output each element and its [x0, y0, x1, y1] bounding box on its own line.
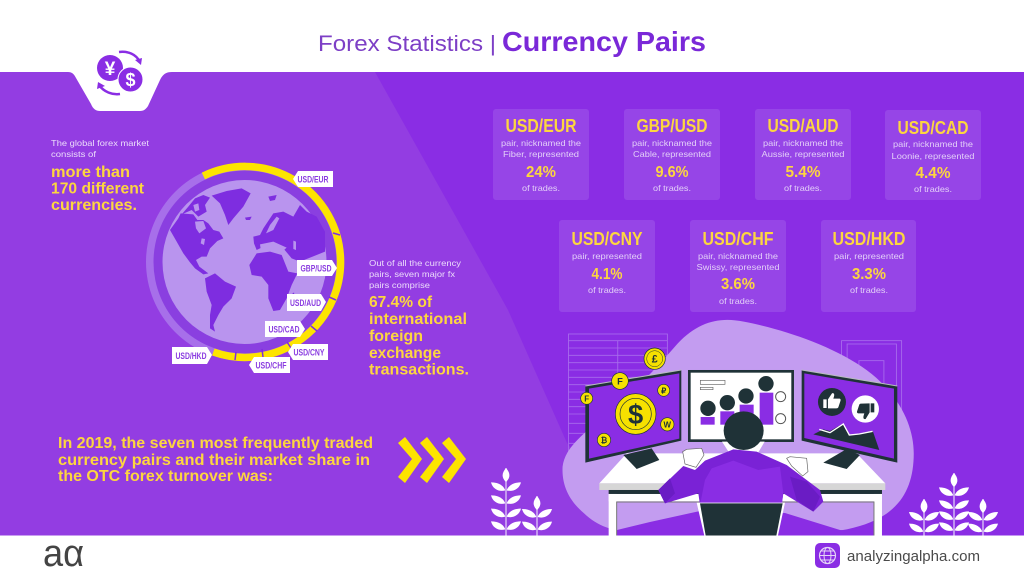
coins: F [617, 376, 623, 386]
coins: $ [628, 399, 643, 430]
globe disc [162, 180, 326, 344]
tag: GBP/USD: GBP/USD [300, 264, 332, 274]
icon: currency exchange tab [68, 52, 172, 111]
website url: analyzingalpha.com [847, 548, 980, 565]
world map [170, 188, 325, 332]
card: USD/AUD [755, 109, 851, 200]
card: USD/CAD: Loonie, represented [892, 151, 975, 161]
text block: 67.4% of transactions: Out of all the currency [369, 258, 462, 268]
text block: 170 currencies: The global forex market [51, 138, 150, 148]
text block: 170 currencies: 170 different [51, 180, 145, 198]
icon: currency exchange tab: $ [125, 70, 136, 90]
tag: GBP/USD [297, 260, 337, 276]
title [318, 26, 706, 57]
text block: 170 currencies [51, 138, 150, 214]
center monitor [688, 370, 794, 442]
text block: 67.4% of transactions: foreign [369, 328, 423, 345]
shirt [658, 449, 823, 512]
card: USD/EUR: Fiber, represented [503, 149, 579, 159]
tag: USD/CNY: USD/CNY [294, 348, 324, 358]
background window and door [568, 334, 902, 453]
coins: W [664, 420, 672, 429]
card: USD/AUD: pair, nicknamed the [763, 138, 843, 148]
card: USD/CNY: pair, represented [572, 251, 642, 261]
footer bar [0, 533, 1024, 576]
neck [722, 442, 765, 454]
text block: 2019 intro [58, 435, 373, 485]
card: GBP/USD [624, 109, 720, 200]
tag: USD/EUR: USD/EUR [298, 174, 329, 184]
card: USD/HKD [821, 220, 916, 312]
desk [599, 453, 885, 540]
person [658, 411, 823, 539]
plants right [909, 473, 998, 536]
card: USD/HKD: pair, represented [834, 251, 904, 261]
title: Forex Statistics | [318, 31, 496, 56]
card: USD/CNY: USD/CNY [572, 229, 642, 249]
text block: 67.4% of transactions: pairs, seven major fx [369, 269, 456, 279]
tag: USD/AUD [287, 294, 326, 311]
coins [581, 348, 674, 447]
card: USD/CAD: USD/CAD [898, 118, 968, 138]
card: GBP/USD: 9.6% [656, 164, 689, 181]
tag: USD/AUD: USD/AUD [290, 298, 321, 308]
yellow share arc [203, 166, 341, 357]
card: USD/CNY [559, 220, 655, 312]
card: GBP/USD: pair, nicknamed the [632, 138, 712, 148]
coins: £ [652, 353, 658, 365]
text block: 2019 intro: the OTC forex turnover was: [58, 468, 273, 485]
text block: 170 currencies: consists of [51, 149, 97, 159]
text block: 2019 intro: In 2019, the seven most frequently traded [58, 435, 373, 452]
tag: USD/EUR [293, 171, 333, 187]
card: USD/AUD: USD/AUD [768, 116, 838, 136]
card: USD/CAD [885, 110, 981, 200]
card: GBP/USD: GBP/USD [636, 116, 708, 136]
text block: 67.4% of transactions: 67.4% of [369, 294, 433, 311]
card: USD/CAD: pair, nicknamed the [893, 139, 973, 149]
card: USD/CHF [690, 220, 786, 312]
left monitor [585, 370, 681, 469]
title: Currency Pairs [502, 26, 706, 57]
card: USD/HKD: USD/HKD [832, 229, 906, 249]
text block: 67.4% of transactions: transactions. [369, 362, 469, 378]
card: USD/CHF: 3.6% [721, 276, 755, 293]
card: USD/CAD: 4.4% [916, 165, 951, 182]
card: USD/EUR: pair, nicknamed the [501, 138, 581, 148]
globe with share ring [146, 163, 344, 373]
card: USD/AUD: Aussie, represented [762, 149, 845, 159]
plants left [491, 468, 552, 536]
logo: a alpha: aα [43, 533, 84, 575]
hands [683, 448, 704, 467]
card: USD/AUD: 5.4% [786, 164, 821, 181]
text block: 67.4% of transactions [369, 258, 469, 378]
card: USD/CNY: of trades. [588, 285, 626, 295]
card: USD/CNY: 4.1% [592, 266, 623, 283]
card: USD/EUR: USD/EUR [506, 116, 576, 136]
text block: 67.4% of transactions: international [369, 311, 467, 328]
text block: 2019 intro: currency pairs and their market share in [58, 452, 370, 469]
tag: USD/CAD [265, 321, 305, 337]
card: USD/CHF: USD/CHF [702, 229, 774, 249]
coins: ₽ [661, 386, 666, 395]
hill under desk [617, 511, 874, 536]
card: USD/HKD: of trades. [850, 285, 888, 295]
coins: ₿ [601, 436, 608, 445]
text block: 170 currencies: more than [51, 164, 130, 181]
blob [563, 320, 914, 535]
card: USD/EUR: of trades. [522, 183, 560, 193]
coins: F [584, 394, 589, 403]
card: USD/CHF: pair, nicknamed the [698, 251, 778, 261]
tag: USD/CAD: USD/CAD [268, 324, 300, 334]
icon: currency exchange tab: ¥ [105, 59, 116, 80]
text block: 67.4% of transactions: exchange [369, 345, 441, 362]
tag: USD/CHF [249, 357, 290, 373]
text block: 67.4% of transactions: pairs comprise [369, 280, 430, 290]
card: USD/CAD: of trades. [914, 184, 952, 194]
card: USD/HKD: 3.3% [852, 266, 886, 283]
icon: web globe [815, 543, 840, 568]
card: USD/EUR: 24% [526, 164, 556, 181]
card: GBP/USD: of trades. [653, 183, 691, 193]
card: USD/CHF: of trades. [719, 296, 757, 306]
arrows: yellow chevrons [398, 437, 466, 483]
card: USD/AUD: of trades. [784, 183, 822, 193]
tag: USD/HKD: USD/HKD [176, 351, 207, 361]
card: GBP/USD: Cable, represented [633, 149, 711, 159]
card: USD/CHF: Swissy, represented [696, 262, 780, 272]
head [724, 411, 764, 450]
card: USD/EUR [493, 109, 589, 200]
text block: 170 currencies: currencies. [51, 197, 137, 214]
tag: USD/CNY [288, 344, 328, 360]
tag: USD/CHF: USD/CHF [256, 360, 287, 370]
chair [697, 503, 785, 539]
right monitor [802, 370, 897, 469]
illustration: trader at desk [491, 320, 998, 540]
tag: USD/HKD [172, 347, 212, 364]
